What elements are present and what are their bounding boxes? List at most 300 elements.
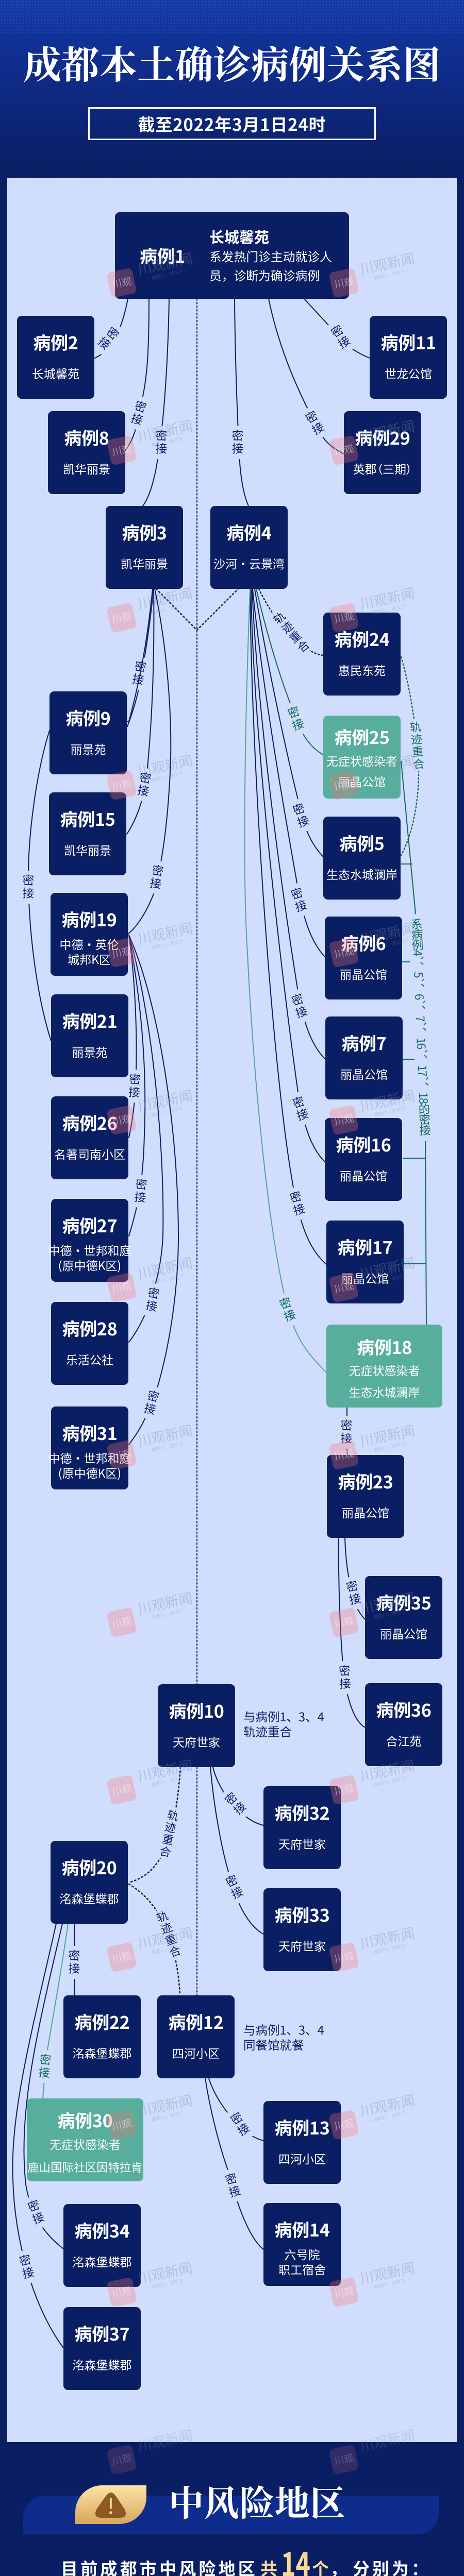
connector: case 3 to case 19: 密 [151,861,165,879]
watermarks: —看四川，观天下— [369,1774,411,1789]
watermarks: 川观 [110,441,132,459]
connector: case 1 to case 3: 密 [156,427,167,444]
case 27 box [51,1199,128,1282]
watermarks: —看四川，观天下— [146,1606,189,1622]
connector: case 19 to case 26: 接 [128,1083,141,1100]
connector: case 23 to case 36: 接 [339,1674,352,1692]
watermarks: —看四川，观天下— [369,1439,411,1454]
case 7 box: 丽晶公馆 [340,1065,388,1082]
connector: case 4 to case 16: 接 [294,1105,310,1124]
watermarks: 川观 [333,1781,355,1799]
connector: case 3 to case 9: 密 [134,657,147,675]
note: case 12: 同餐馆就餐 [243,2036,304,2053]
connector: case 4 to case 6: 密 [289,884,305,903]
watermarks: 川观 [110,1948,132,1966]
watermarks: 川观 [110,2283,132,2301]
connector: bracket cases 5 to 18: 系病例4`、5`、6`、7`、16`、17`、18的密接 [408,918,434,1137]
case 20 box: 病例20 [62,1854,117,1879]
connector: case 10 to case 20 dotted [129,1767,183,1883]
case 34 box [63,2204,141,2287]
connector: case 4 to case 24 dotted: 迹 [277,617,296,637]
case 5 box [323,817,401,900]
connector: case 4 to case 16 [251,589,325,1162]
case 4 box: 病例4 [226,519,272,545]
case 8 box [48,411,125,494]
watermarks: 川观 [333,2283,355,2301]
connector: case 1 to case 2: 密 [103,323,123,343]
watermarks: —看四川，观天下— [146,1774,189,1789]
watermarks: —看四川，观天下— [146,2109,189,2124]
case 15 box [49,792,126,875]
watermarks: —看四川，观天下— [369,769,411,785]
connector: case 19 to case 28 [129,935,163,1342]
watermarks: 川观新闻 [136,750,194,781]
connector: case 4 to case 18: 密 [277,1293,293,1313]
watermarks: 川观 [110,2115,132,2133]
connector: case 1 to case 8 [125,299,151,450]
case 19 box [51,893,128,976]
case 12 box [157,1995,235,2078]
note: case 10 [243,1707,324,1740]
connector: case 4 to case 25: 密 [285,702,302,722]
watermarks: 川观新闻 [136,1084,194,1116]
case 14 box: 病例14 [275,2216,329,2242]
case 29 box [344,411,421,494]
case 28 box [51,1302,128,1385]
watermarks: 川观新闻 [358,1922,417,1953]
connector: case 18 to case 23 [339,1408,354,1455]
connector: case 18 to case 23: 密 [341,1417,352,1433]
case 24 box [323,613,401,696]
case 18 box asymptomatic [326,1325,442,1408]
connector: case 1 to case 11 [304,299,370,358]
connector: case 1 to case 4 [230,299,248,506]
watermarks: 川观新闻 [358,415,417,446]
title: 成都本土确诊病例关系图 [23,35,441,90]
case 20 box: 洺森堡蝶郡 [60,1889,119,1907]
connector: case 10 to case 20 dotted: 迹 [163,1818,178,1836]
connector: case 3 to case 19: 接 [149,874,163,892]
watermarks: 川观新闻 [358,1587,417,1618]
connector: case 4 to case 18 [245,589,326,1372]
case 24 box: 惠民东苑 [338,661,386,679]
case 22 box: 病例22 [75,2009,129,2034]
watermarks: 川观新闻 [358,917,417,948]
connector: case 20 to case 30: 密 [39,2050,52,2068]
case 3 box: 凯华丽景 [121,554,168,572]
connector: case 1 to case 4: 密 [232,427,243,444]
connector: case 12 to case 14: 密 [223,2169,239,2188]
case 35 box: 丽晶公馆 [380,1624,427,1642]
connector: case 3 to case 19 [128,589,171,934]
connector: case 4 to case 17: 密 [288,1187,303,1206]
watermarks: 川观 [333,1446,355,1464]
case 9 box: 病例9 [65,705,111,730]
note: case 10: 轨迹重合 [243,1722,292,1740]
watermarks: —看四川，观天下— [369,1606,411,1622]
connector: case 1 to case 8: 密 [133,397,148,416]
watermarks: 川观 [333,2115,355,2133]
case 13 box [263,2101,341,2184]
connector: case 3 to case 15: 密 [139,769,153,787]
connector: case 19 to case 31 [129,935,178,1445]
case 22 box: 洺森堡蝶郡 [72,2044,132,2061]
connector: case 12 to case 13: 接 [234,2119,253,2139]
connector: case 20 to case 12 dotted: 合 [167,1941,183,1961]
case 27 box: (原中德K区) [58,1256,121,1274]
connector: case 10 to case 20 dotted: 轨 [166,1806,180,1824]
connector: case 19 to case 31: 密 [146,1386,161,1405]
watermarks: 川观 [110,1613,132,1631]
connector: case 24 to case 5 dotted: 重 [411,742,424,760]
connector: case 4 to case 17: 接 [291,1199,307,1218]
connector: case 20 to case 34: 密 [25,2196,42,2215]
connector: case 1 to case 8: 接 [129,409,145,428]
connector: case 4 to case 16: 密 [290,1092,306,1111]
case 16 box [325,1118,402,1201]
case 21 box [51,994,128,1077]
watermarks: 川观 [110,776,132,794]
case 6 box: 丽晶公馆 [340,965,387,982]
connector: case 20 to case 12 dotted [129,1884,185,1995]
connector: case 4 to case 5: 密 [290,799,307,819]
watermarks: —看四川，观天下— [146,602,189,617]
connector: case 10 to case 33: 密 [223,1871,240,1891]
watermarks: 川观新闻 [358,2089,417,2121]
watermarks: —看四川，观天下— [369,2276,411,2292]
connector: case 19 to case 26: 密 [129,1070,141,1088]
case 27 box: 中德·世邦和庭 [48,1241,131,1259]
connector: case 20 to case 37: 密 [18,2250,32,2269]
watermarks: 川观新闻 [136,247,194,279]
date badge: 截至2022年3月1日24时 [138,111,326,136]
case 33 box: 天府世家 [278,1937,326,1954]
case 25 box asymptomatic: 无症状感染者 [326,752,397,769]
watermarks: —看四川，观天下— [146,769,189,785]
date badge [88,107,376,140]
case 31 box: (原中德K区) [58,1464,121,1481]
case 7 box: 病例7 [341,1030,387,1055]
watermarks: —看四川，观天下— [369,2109,411,2124]
case 13 box: 病例13 [275,2114,329,2140]
connector: case 23 to case 36 [336,1538,365,1727]
case 17 box: 病例17 [338,1234,392,1259]
connector: case 23 to case 35: 密 [344,1577,359,1595]
watermarks: 川观 [333,441,355,459]
case 30 box asymptomatic: 病例30 [58,2107,112,2132]
watermarks: 川观 [333,943,355,961]
case 2 box: 病例2 [33,329,78,354]
case 7 box [325,1016,403,1099]
case 28 box: 乐活公社 [66,1350,113,1368]
watermarks: 川观新闻 [136,2424,194,2455]
case 28 box: 病例28 [62,1315,117,1341]
case 18 box asymptomatic: 无症状感染者 [349,1361,420,1379]
connector: case 20 to case 12 dotted: 重 [162,1930,179,1949]
watermarks: 川观新闻 [136,2257,194,2288]
connector: case 19 to case 28: 密 [147,1284,161,1302]
watermarks: —看四川，观天下— [369,267,411,282]
case 5 box: 病例5 [339,830,385,855]
connector: case 1 to case 11: 接 [335,332,353,352]
connector: case 12 to case 14 [205,2078,263,2249]
case 1 box: 病例1 [140,243,185,268]
connector: case 20 to case 37: 接 [21,2263,36,2282]
case 1 box: 员，诊断为确诊病例 [209,266,320,284]
case 36 box: 病例36 [376,1697,431,1722]
watermarks: —看四川，观天下— [146,1439,189,1454]
watermarks: —看四川，观天下— [369,434,411,450]
watermarks: 川观 [333,1948,355,1966]
connector: case 23 to case 36: 密 [338,1662,351,1679]
case 14 box: 职工宿舍 [278,2260,326,2278]
connector: case 1 to case 2: 接 [95,333,114,353]
connector: case 20 to case 37 [13,1924,63,2347]
case 30 box asymptomatic: 无症状感染者 [49,2135,121,2153]
watermarks: 川观 [333,608,355,626]
watermarks: 川观新闻 [136,1922,194,1953]
watermarks: 川观新闻 [136,582,194,614]
case 18 box asymptomatic: 病例18 [357,1334,412,1359]
watermarks: 川观新闻 [358,750,417,781]
watermarks: 川观 [333,2450,355,2468]
connector: case 20 to case 30 [36,1924,68,2098]
connector: case 20 to case 22 [67,1924,82,1995]
case 34 box: 洺森堡蝶郡 [72,2252,132,2270]
center dotted line [196,299,197,1995]
connector: case 12 to case 13 [209,2078,263,2142]
connector: case 23 to case 35 [342,1538,365,1619]
case 36 box: 合江苑 [386,1732,422,1749]
case 17 box [326,1221,404,1303]
case 21 box: 病例21 [62,1008,117,1033]
connector: case 18 to case 23: 接 [341,1430,352,1446]
watermarks: 川观 [110,1111,132,1129]
case 11 box: 世龙公馆 [385,364,432,382]
case 37 box: 洺森堡蝶郡 [72,2355,132,2373]
case 35 box [365,1576,442,1659]
watermarks: 川观新闻 [358,582,417,614]
note: case 12 [243,2021,324,2053]
watermarks: 川观新闻 [358,1084,417,1116]
connector: case 20 to case 22: 密 [69,1947,80,1963]
watermarks: 川观 [110,274,132,292]
case 19 box: 城邦K区 [68,950,111,968]
connector: case 3 to case 15 [127,589,155,834]
connector: case 1 to case 29: 密 [302,406,321,427]
watermarks: —看四川，观天下— [369,1104,411,1120]
watermarks: 川观 [333,776,355,794]
connector: case 4 to case 17 [250,589,326,1264]
case 2 box [17,316,94,399]
case 3 box [106,506,183,589]
watermarks: 川观 [110,2450,132,2468]
connector: case 1 to case 4: 接 [232,440,243,456]
connector: case 24 to case 5 dotted: 迹 [410,730,423,748]
connector: dotted case 3 and case 4 to center line [156,589,238,630]
watermarks: 川观新闻 [136,1419,194,1451]
watermarks: 川观新闻 [358,1252,417,1283]
case 10 box [158,1684,235,1767]
case 19 box: 病例19 [62,906,117,931]
case 29 box: 病例29 [355,425,410,450]
case 15 box: 凯华丽景 [64,841,111,858]
case 14 box [263,2203,341,2286]
case 8 box: 凯华丽景 [63,460,110,477]
case 23 box [327,1455,404,1538]
case 32 box [263,1786,341,1869]
case 25 box asymptomatic [323,716,401,799]
icon: warning [75,2485,146,2524]
case 10 box: 病例10 [169,1698,224,1723]
case 25 box asymptomatic: 丽晶公馆 [338,772,386,790]
watermarks: 川观新闻 [136,1754,194,1786]
watermarks: 川观新闻 [358,2257,417,2288]
watermarks: 川观 [110,608,132,626]
watermarks: —看四川，观天下— [146,1272,189,1287]
case 1 box [115,212,349,299]
case 11 box [370,316,447,399]
connector: case 4 to case 7: 密 [289,990,305,1009]
connector: case 12 to case 13: 密 [227,2108,246,2128]
connector: case 10 to case 20 dotted: 合 [158,1842,173,1860]
case 12 box: 病例12 [169,2009,223,2034]
connector: case 1 to case 3 [143,299,169,506]
case 1 box: 长城馨苑 [209,226,269,247]
case 29 box: 英郡（三期） [353,460,412,477]
case 32 box: 病例32 [275,1800,329,1825]
case 17 box: 丽晶公馆 [341,1269,389,1286]
watermarks: 川观 [333,1278,355,1296]
case 11 box: 病例11 [381,329,436,354]
connector: case 24 to case 5 dotted [401,657,427,855]
watermarks: 川观新闻 [136,2089,194,2121]
case 9 box [49,691,127,774]
watermarks: 川观新闻 [136,1587,194,1618]
watermarks: —看四川，观天下— [146,434,189,450]
watermarks: 川观新闻 [136,917,194,948]
case 31 box: 病例31 [62,1420,117,1445]
connector: case 4 to case 6 [253,589,325,957]
case 32 box: 天府世家 [278,1835,326,1852]
watermarks: —看四川，观天下— [146,1941,189,1957]
case 37 box [63,2307,141,2390]
case 26 box [51,1096,128,1179]
case 4 box: 沙河·云景湾 [213,554,285,572]
case 21 box: 丽景苑 [72,1043,107,1060]
connector: case 4 to case 5: 接 [295,811,311,831]
connector: case 1 to case 2 [92,299,128,358]
case 5 box: 生态水城澜岸 [326,865,397,883]
connector: case 1 to case 11: 密 [328,321,346,341]
connector: case 19 to case 27 [129,935,150,1236]
connector: case 3 to case 21 [21,589,153,1041]
connector: case 3 to case 15: 接 [136,781,151,800]
connector: case 24 to case 5 dotted: 合 [412,755,425,772]
connector: case 20 to case 34 [23,1924,63,2249]
connector: case 19 to case 31: 接 [143,1399,158,1418]
connector: case 10 to case 32: 接 [229,1798,249,1818]
case 31 box [51,1406,128,1489]
connector: case 4 to case 24 dotted: 重 [285,626,305,647]
case 13 box: 四河小区 [278,2149,326,2167]
connector: case 10 to case 20 dotted: 重 [161,1830,175,1849]
connector: case 4 to case 7 [252,589,325,1059]
note: case 12: 与病例1、3、4 [243,2021,324,2038]
connector: case 3 to case 21: 接 [23,885,34,901]
case 37 box: 病例37 [75,2320,129,2346]
connector: case 10 to case 33: 接 [228,1883,246,1902]
case 6 box: 病例6 [341,930,386,955]
watermarks: —看四川，观天下— [369,602,411,617]
connector: case 4 to case 24 dotted: 轨 [269,607,289,628]
connector: case 4 to case 18: 接 [281,1305,298,1325]
case 31 box: 中德·世邦和庭 [48,1449,131,1466]
connector: case 10 to case 33 [210,1767,263,1934]
connector: case 19 to case 27: 接 [134,1188,147,1206]
connector: case 4 to case 7: 接 [293,1002,309,1021]
case 8 box: 病例8 [64,425,109,450]
connector: case 3 to case 21: 密 [23,872,34,888]
case 16 box: 丽晶公馆 [340,1166,387,1184]
case 36 box [365,1683,442,1766]
watermarks: —看四川，观天下— [369,1941,411,1957]
case 1 box: 系发热门诊主动就诊人 [209,247,332,265]
connector: case 3 to case 9: 接 [131,670,145,688]
watermarks: 川观新闻 [358,2424,417,2455]
watermarks: 川观 [110,1446,132,1464]
connector: case 12 to case 14: 接 [227,2181,242,2200]
watermarks: 川观 [110,1781,132,1799]
heading: medium-risk areas: 中风险地区 [169,2476,345,2526]
case 18 box asymptomatic: 生态水城澜岸 [349,1383,420,1400]
connector: case 1 to case 29 [269,299,344,454]
connector: case 10 to case 32: 密 [221,1788,241,1808]
connector: case 4 to case 25 [256,589,323,755]
watermarks: —看四川，观天下— [369,1272,411,1287]
case 23 box: 病例23 [338,1468,393,1494]
connector: bracket cases 5 to 18 [401,761,434,1325]
case 2 box: 长城馨苑 [32,364,79,382]
watermarks: 川观 [333,1613,355,1631]
case 26 box: 病例26 [62,1110,117,1135]
connector: case 20 to case 34: 接 [30,2208,46,2227]
case 9 box: 丽景苑 [70,740,106,757]
watermarks: 川观新闻 [136,1252,194,1283]
connector: case 4 to case 5 [255,589,323,857]
case 30 box asymptomatic [27,2098,143,2181]
watermarks: —看四川，观天下— [146,937,189,952]
case 26 box: 名著司南小区 [54,1145,125,1162]
case 34 box: 病例34 [75,2217,129,2243]
watermarks: 川观 [110,1278,132,1296]
connector: case 4 to case 24 dotted: 合 [293,636,312,656]
connector: case 24 to case 5 dotted: 轨 [409,718,422,735]
watermarks: —看四川，观天下— [369,937,411,952]
connector: case 4 to case 6: 接 [293,896,309,915]
connector: case 10 to case 32 [213,1767,263,1825]
connector: case 19 to case 26 [126,935,143,1138]
connector: case 1 to case 29: 接 [309,418,327,438]
case 22 box [63,1995,141,2078]
case 12 box: 四河小区 [172,2044,220,2061]
connector: case 23 to case 35: 接 [347,1589,362,1608]
case 27 box: 病例27 [62,1212,117,1238]
connector: case 20 to case 30: 接 [38,2063,51,2081]
case 16 box: 病例16 [336,1131,391,1157]
connector: case 20 to case 12 dotted: 轨 [154,1906,170,1926]
case 15 box: 病例15 [60,806,115,831]
